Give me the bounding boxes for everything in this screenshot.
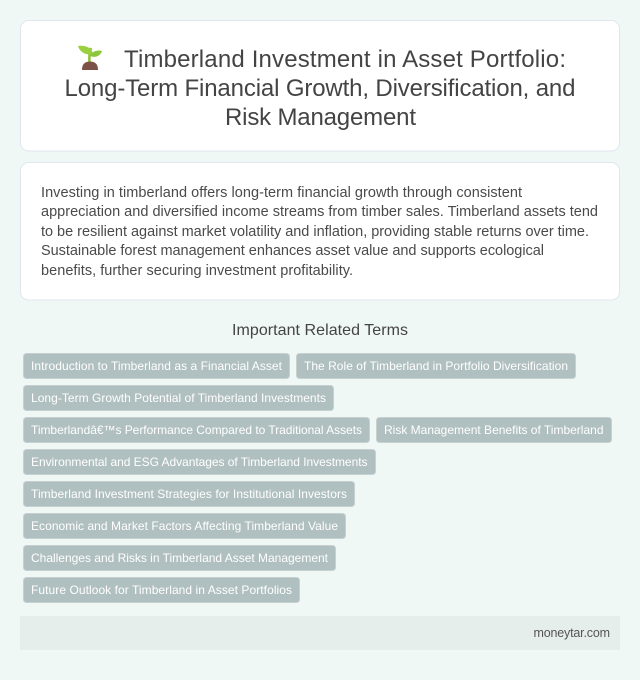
heading: important related terms: Important Related Terms — [232, 322, 408, 339]
description text — [41, 185, 598, 279]
tag: Economic and Market Factors Affecting Timberland Value — [31, 519, 338, 533]
related terms tags — [24, 354, 612, 602]
tag: Timberland Investment Strategies for Institutional Investors — [31, 487, 347, 501]
tag — [24, 354, 290, 378]
tag — [24, 482, 354, 506]
description text: to be resilient against market volatility and inflation, providing stable returns over time. — [41, 224, 589, 240]
title text: Long-Term Financial Growth, Diversification, and — [64, 75, 576, 102]
description text: Sustainable forest management enhances asset value and supports ecological — [41, 243, 544, 259]
tag — [24, 546, 336, 570]
tag: Challenges and Risks in Timberland Asset Management — [31, 551, 329, 565]
title text: Timberland Investment in Asset Portfolio: — [124, 46, 566, 73]
tag: Risk Management Benefits of Timberland — [384, 423, 604, 437]
tag: Timberlandâ€™s Performance Compared to Traditional Assets — [31, 423, 362, 437]
footer source text: moneytar.com — [534, 626, 610, 640]
tag: Introduction to Timberland as a Financial Asset — [31, 359, 283, 373]
description text: Investing in timberland offers long-term financial growth through consistent — [41, 185, 522, 201]
panel: description — [20, 162, 620, 300]
tag — [24, 514, 346, 538]
title text: Risk Management — [225, 104, 416, 131]
tag — [24, 386, 334, 410]
description text: appreciation and diversified income streams from timber sales. Timberland assets tend — [41, 204, 598, 220]
tag — [24, 450, 376, 474]
tag: Long-Term Growth Potential of Timberland Investments — [31, 391, 326, 405]
tag — [24, 418, 370, 442]
description text: benefits, further securing investment profitability. — [41, 263, 353, 279]
title panel — [20, 20, 620, 151]
tag: The Role of Timberland in Portfolio Diversification — [304, 359, 568, 373]
footer — [20, 616, 620, 650]
tag — [376, 418, 612, 442]
tag — [24, 578, 300, 602]
icon: seedling — [78, 46, 102, 70]
tag: Future Outlook for Timberland in Asset Portfolios — [31, 583, 292, 597]
title text — [64, 46, 576, 131]
tag: Environmental and ESG Advantages of Timberland Investments — [31, 455, 368, 469]
tag — [296, 354, 576, 378]
